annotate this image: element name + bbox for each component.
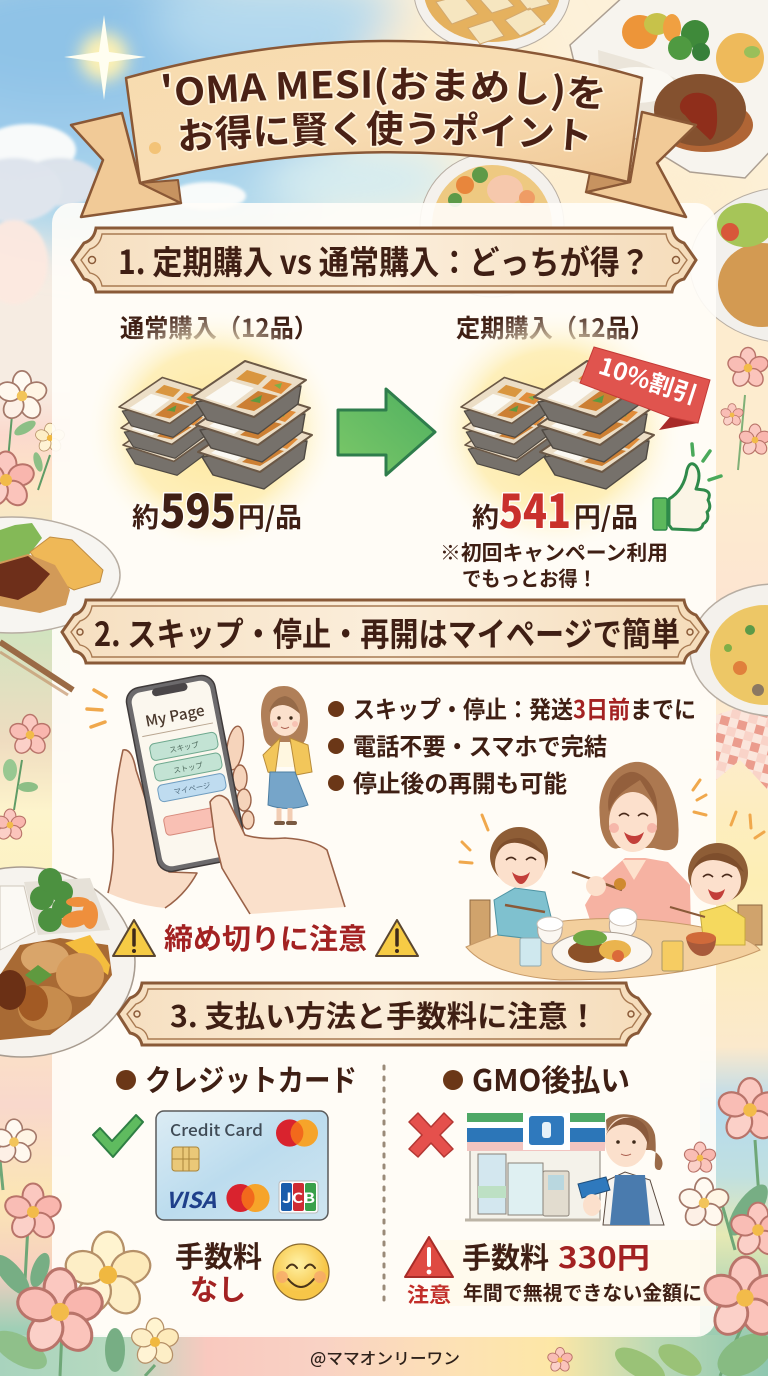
- flowers and leaves: left edge: [0, 371, 66, 842]
- heading plaque: section 3: 3. 支払い方法と手数料に注意！: [170, 992, 598, 1036]
- footer credit: @ママオンリーワン: [310, 1345, 460, 1369]
- heading: GMO deferred payment: GMO後払い: [472, 1056, 630, 1100]
- subheading: regular purchase: 通常購入（12品）: [120, 309, 318, 345]
- illustration: family eating: [460, 762, 764, 980]
- price: regular: 595: [160, 476, 236, 542]
- price: regular: 約: [132, 496, 159, 535]
- food: big bento plate: [0, 867, 135, 1057]
- fee: none: [175, 1234, 262, 1309]
- icon: motion lines left of phone: [87, 690, 106, 727]
- price: regular: 円/品: [238, 496, 302, 535]
- food: cutlet plate: [690, 187, 768, 343]
- heading plaque: section 1: 1. 定期購入 vs 通常購入：どっちが得？: [118, 236, 650, 284]
- icon: check mark: [93, 1115, 143, 1157]
- discount ribbon: 10%割引: [595, 346, 703, 411]
- icon: cross mark: [409, 1113, 453, 1157]
- illustration: hand holding phone: スキップ: [168, 739, 200, 756]
- illustration: hand holding phone: ストップ: [172, 760, 204, 776]
- credit card: [156, 1111, 328, 1220]
- warning: deadline: 締め切りに注意: [164, 916, 367, 958]
- icon: thumbs up: [653, 444, 721, 530]
- napkin: [716, 698, 768, 790]
- price: subscription: 541: [499, 476, 571, 542]
- panel: white content card: [52, 203, 716, 1337]
- flowers and leaves: bottom edges: [0, 1078, 768, 1376]
- glow behind left trays: [85, 308, 341, 552]
- icon: smiley: [273, 1244, 329, 1300]
- credit card: JCB: [282, 1188, 315, 1208]
- heading: credit card: クレジットカード: [145, 1056, 357, 1100]
- heading plaque: section 1: [72, 228, 696, 292]
- warning: deadline: [113, 916, 418, 958]
- warning: fee 330 yen: [405, 1235, 702, 1308]
- heading plaque: section 2: 2. スキップ・停止・再開はマイページで簡単: [94, 608, 680, 656]
- food: shrimp soup bowl: [420, 153, 564, 297]
- discount ribbon: [580, 346, 710, 430]
- illustration: store staff woman: [578, 1114, 664, 1225]
- illustration: convenience store: [465, 1113, 605, 1220]
- price: subscription: 約: [472, 496, 499, 535]
- warning: fee 330 yen: 330円: [558, 1235, 650, 1277]
- price: regular: [132, 476, 302, 542]
- price: subscription: [472, 476, 638, 542]
- title: 'OMA MESI(おまめし)を: [160, 65, 605, 114]
- credit card: VISA: [166, 1183, 217, 1215]
- bullet list: [328, 690, 696, 799]
- price: subscription: 円/品: [574, 496, 638, 535]
- heading plaque: section 2: [62, 600, 708, 663]
- arrow: [338, 389, 435, 475]
- warning: fee 330 yen: 手数料: [462, 1235, 549, 1277]
- warning: fee 330 yen: 注意: [407, 1278, 451, 1308]
- note: first campaign: ※初回キャンペーン利用: [440, 536, 668, 566]
- icon: sparkle: [64, 15, 146, 100]
- title line two: お得に賢く使うポイント: [178, 108, 590, 153]
- meal tray stack: regular: [119, 361, 312, 489]
- illustration: small woman: [261, 686, 312, 823]
- banner: title ribbon: [71, 41, 696, 217]
- illustration: hand holding phone: [108, 673, 345, 914]
- food: fried rice plate: [690, 584, 768, 716]
- bullet list: 停止後の再開も可能: [353, 764, 567, 799]
- heading plaque: section 3: [118, 983, 650, 1045]
- bullet list: 電話不要・スマホで完結: [353, 727, 607, 762]
- glow behind right trays: [427, 308, 683, 552]
- note: even better value: でもっとお得！: [462, 562, 597, 592]
- flowers and leaves: right edge: [720, 347, 768, 470]
- illustration: hand holding phone: マイページ: [173, 780, 212, 798]
- fee: none: 手数料: [175, 1234, 262, 1276]
- warning: fee 330 yen: 年間で無視できない金額に: [463, 1277, 702, 1306]
- food: tofu soup bowl: [414, 0, 570, 52]
- food: omelet and hamburg plate: [0, 517, 120, 695]
- subheading: subscription purchase: 定期購入（12品）: [456, 309, 654, 345]
- bullet list: スキップ・停止：発送3日前までに: [353, 690, 696, 725]
- fee: none: なし: [190, 1267, 246, 1309]
- illustration: hand holding phone: My Page: [143, 700, 206, 732]
- credit card: Credit Card: [170, 1117, 263, 1141]
- flowers and leaves over card corners: [0, 1119, 768, 1376]
- food: bento tray: [570, 0, 768, 178]
- meal tray stack: subscription: [461, 361, 654, 489]
